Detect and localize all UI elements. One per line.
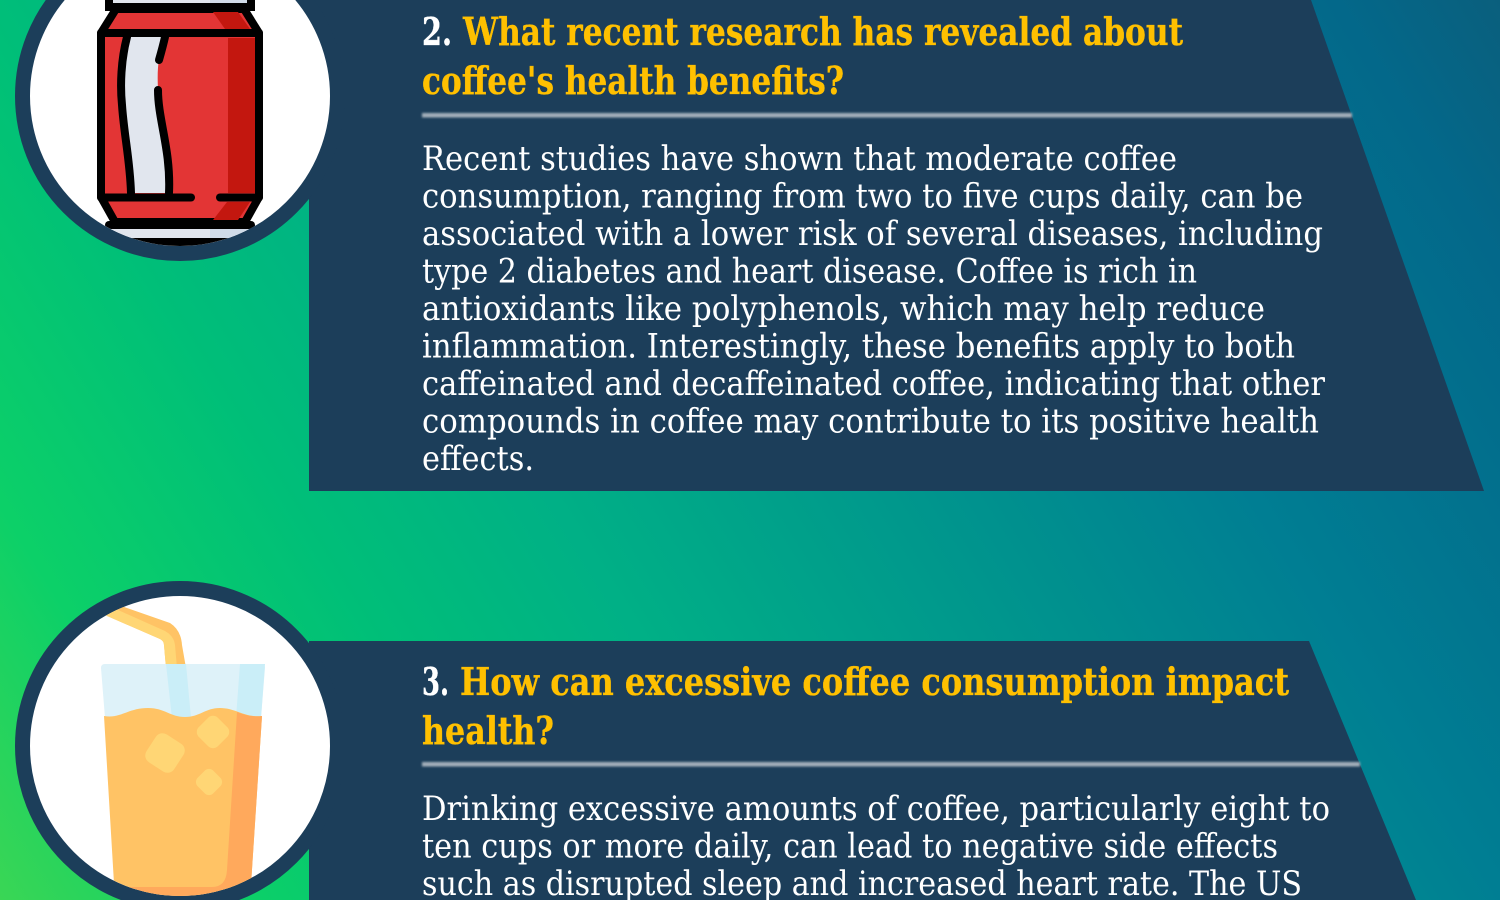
- heading: question 2: What recent research has revealed about: [462, 9, 1183, 54]
- text block: answer 2: consumption, ranging from two to five cups daily, can be: [422, 176, 1303, 216]
- wave stripe: [125, 37, 166, 193]
- heading: question 3: How can excessive coffee consumption impact: [460, 659, 1289, 704]
- ice cubes: [145, 734, 185, 773]
- text block: answer 2: caffeinated and decaffeinated coffee, indicating that other: [422, 364, 1326, 403]
- heading: question 2: [422, 9, 1183, 103]
- heading: question 3: [422, 659, 1289, 753]
- text block: answer 3: ten cups or more daily, can lead to negative side effects: [422, 826, 1278, 866]
- dark shade: [228, 38, 255, 193]
- icon: iced drink in circle: [22, 588, 338, 900]
- lid silver: [113, 0, 210, 3]
- text block: answer 2: associated with a lower risk of several diseases, including: [422, 214, 1323, 253]
- text block: answer 2: antioxidants like polyphenols, which may help reduce: [422, 289, 1265, 328]
- text block: answer 2: [422, 139, 1326, 478]
- heading: question 3: 3.: [422, 659, 449, 704]
- text block: answer 2: type 2 diabetes and heart disease. Coffee is rich in: [422, 252, 1197, 290]
- text block: answer 2: effects.: [422, 439, 534, 478]
- straw: [106, 607, 186, 664]
- panel: question 3: [309, 641, 1416, 900]
- text block: answer 2: compounds in coffee may contribute to its positive health: [422, 402, 1319, 440]
- liquid: [104, 708, 262, 900]
- text block: answer 2: Recent studies have shown that moderate coffee: [422, 139, 1177, 178]
- can body: [101, 9, 259, 222]
- heading: question 2: 2.: [422, 9, 452, 54]
- glass top: [101, 664, 265, 718]
- heading: question 2: coffee's health benefits?: [422, 58, 844, 103]
- text block: answer 3: [422, 789, 1330, 900]
- heading: question 3: health?: [422, 708, 554, 753]
- panel: question 2: [309, 0, 1484, 491]
- text block: answer 3: Drinking excessive amounts of coffee, particularly eight to: [422, 789, 1330, 828]
- bottom rim silver: [112, 229, 250, 239]
- icon: soda can in circle: [22, 0, 338, 254]
- text block: answer 2: inflammation. Interestingly, these benefits apply to both: [422, 326, 1295, 366]
